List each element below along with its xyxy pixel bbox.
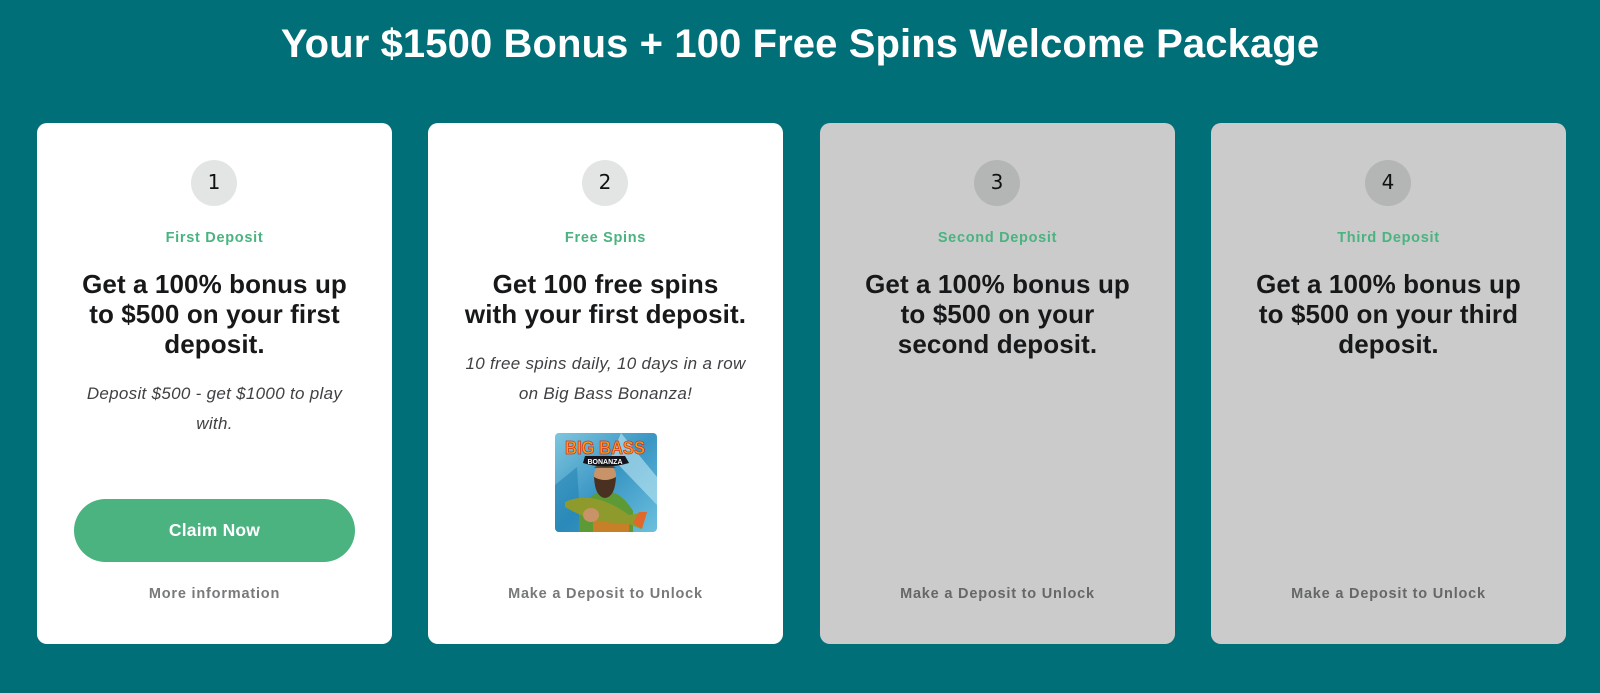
link: more information: More information: [149, 586, 280, 602]
heading: [1256, 269, 1521, 359]
heading: [82, 269, 347, 359]
heading: Get 100 free spins: [493, 269, 718, 299]
panel: second deposit: [820, 123, 1175, 644]
heading: Get a 100% bonus up: [1256, 269, 1521, 299]
panel: third deposit: [1211, 123, 1566, 644]
step number 1: [191, 160, 237, 206]
panel: first deposit: [37, 123, 392, 644]
heading: to $500 on your: [901, 299, 1094, 329]
button: claim now: [74, 499, 355, 562]
step number 3: [974, 160, 1020, 206]
description: [87, 384, 343, 432]
heading: Get a 100% bonus up: [82, 269, 347, 299]
button: claim now: Claim Now: [169, 520, 260, 540]
icon: Big Bass Bonanza game tile: BIG BASS: [565, 438, 645, 458]
icon: Big Bass Bonanza game tile: BONANZA: [588, 459, 622, 466]
description: on Big Bass Bonanza!: [519, 384, 692, 402]
link: unlock: Make a Deposit to Unlock: [508, 586, 703, 602]
heading: [865, 269, 1130, 359]
title: Your $1500 Bonus + 100 Free Spins Welcome Package: [281, 22, 1319, 66]
label: free spins: Free Spins: [565, 230, 646, 246]
step number 4: 4: [1382, 170, 1394, 194]
description: 10 free spins daily, 10 days in a row: [465, 354, 746, 373]
step number 1: 1: [208, 170, 220, 194]
label: first deposit: First Deposit: [166, 230, 263, 246]
heading: second deposit.: [898, 329, 1097, 359]
label: second deposit: Second Deposit: [938, 230, 1057, 246]
link: unlock: Make a Deposit to Unlock: [1291, 586, 1486, 602]
step number 3: 3: [991, 170, 1003, 194]
panel: free spins: [428, 123, 783, 644]
step number 2: 2: [599, 170, 611, 194]
heading: to $500 on your third: [1259, 299, 1518, 329]
step number 4: [1365, 160, 1411, 206]
heading: [464, 269, 746, 329]
description: Deposit $500 - get $1000 to play: [87, 384, 342, 403]
description: [465, 354, 746, 402]
link: unlock: Make a Deposit to Unlock: [900, 586, 1095, 602]
label: third deposit: Third Deposit: [1337, 230, 1440, 246]
heading: deposit.: [1338, 329, 1439, 359]
heading: deposit.: [164, 329, 265, 359]
heading: with your first deposit.: [465, 299, 746, 329]
step number 2: [582, 160, 628, 206]
heading: Get a 100% bonus up: [865, 269, 1130, 299]
heading: to $500 on your first: [89, 299, 340, 329]
icon: Big Bass Bonanza game tile: [555, 433, 657, 532]
description: with.: [196, 414, 233, 432]
